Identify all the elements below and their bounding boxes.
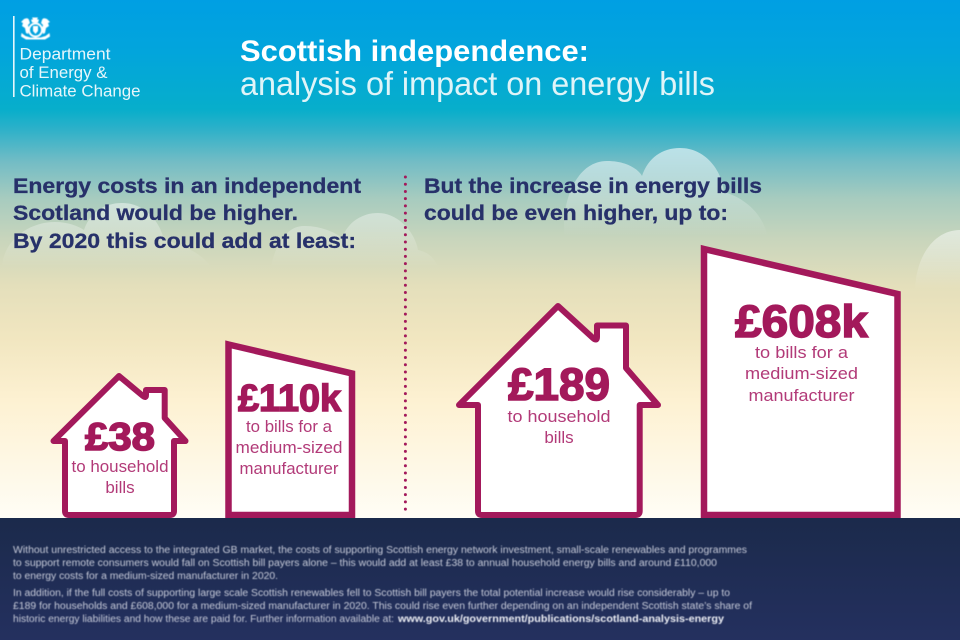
caption: to bills for a medium-sized manufacturer	[236, 417, 342, 478]
value: £189: £189	[508, 359, 610, 410]
footer text: £189 for households and £608,000 for a medium-sized manufacturer in 2020. This could rise even further depending on an independent Scottish state’s share of	[13, 601, 752, 612]
icon: small factory outline	[228, 344, 352, 515]
caption: to bills for a medium-sized manufacturer: to bills for a	[755, 343, 849, 362]
caption: to household bills: bills	[544, 428, 574, 447]
footer text: Without unrestricted access to the integrated GB market, the costs of supporting Scottish energy network investment, small-scale renewables and programmes	[13, 545, 747, 556]
caption: to bills for a medium-sized manufacturer: manufacturer	[748, 386, 855, 405]
title: analysis of impact on energy bills	[240, 65, 715, 102]
heading: energy costs higher	[13, 174, 361, 253]
caption: to household bills	[508, 407, 610, 447]
footer text	[13, 545, 752, 625]
logo wordmark: Department	[20, 44, 111, 64]
icon: small house outline	[54, 376, 186, 515]
footer text: to energy costs for a medium-sized manufacturer in 2020.	[13, 571, 278, 582]
logo wordmark: Climate Change	[20, 82, 140, 100]
icon: large house outline	[459, 306, 658, 515]
caption: to bills for a medium-sized manufacturer: medium-sized	[236, 438, 342, 457]
caption: to household bills: to household	[72, 457, 168, 476]
dotted divider	[404, 177, 407, 510]
value: £608k: £608k	[735, 296, 869, 347]
caption: to household bills	[72, 457, 168, 497]
heading: increase could be higher: But the increase in energy bills	[424, 174, 762, 198]
title	[240, 35, 715, 102]
footer band	[0, 518, 960, 640]
clouds	[2, 148, 960, 290]
heading: energy costs higher: By 2020 this could add at least:	[13, 229, 356, 253]
footer text: to support remote consumers would fall on Scottish bill payers alone – this would add at least £38 to annual household energy bills and around £110,000	[13, 558, 717, 569]
caption: to bills for a medium-sized manufacturer: medium-sized	[745, 364, 858, 383]
heading: energy costs higher: Energy costs in an independent	[13, 174, 361, 198]
heading: increase could be higher	[424, 174, 762, 225]
caption: to household bills: to household	[508, 407, 610, 426]
footer text: historic energy liabilities and how these are paid for. Further information available at:	[13, 614, 394, 625]
heading: increase could be higher: could be even higher, up to:	[424, 201, 728, 225]
manufacturer panel: £608k	[704, 249, 898, 515]
value: £38: £38	[85, 416, 155, 459]
household panel: £189	[459, 306, 658, 515]
logo wordmark: of Energy &	[20, 63, 108, 82]
icon: royal coat of arms crest	[21, 18, 50, 40]
caption: to bills for a medium-sized manufacturer: manufacturer	[240, 459, 339, 478]
icon: large factory outline	[704, 249, 898, 515]
caption: to household bills: bills	[105, 478, 135, 497]
value: £110k: £110k	[238, 378, 342, 420]
logo: Department of Energy & Climate Change	[13, 16, 140, 100]
footer text: www.gov.uk/government/publications/scotland-analysis-energy	[397, 614, 724, 625]
logo wordmark	[20, 44, 140, 100]
caption: to bills for a medium-sized manufacturer	[745, 343, 858, 405]
caption: to bills for a medium-sized manufacturer: to bills for a	[246, 417, 333, 436]
household panel: £38	[54, 376, 186, 515]
footer text: In addition, if the full costs of supporting large scale Scottish renewables fell to Scottish bill payers the total potential increase would rise considerably – up to	[13, 588, 730, 599]
heading: energy costs higher: Scotland would be higher.	[13, 201, 298, 225]
title: Scottish independence:	[240, 35, 589, 68]
manufacturer panel: £110k	[228, 344, 352, 515]
